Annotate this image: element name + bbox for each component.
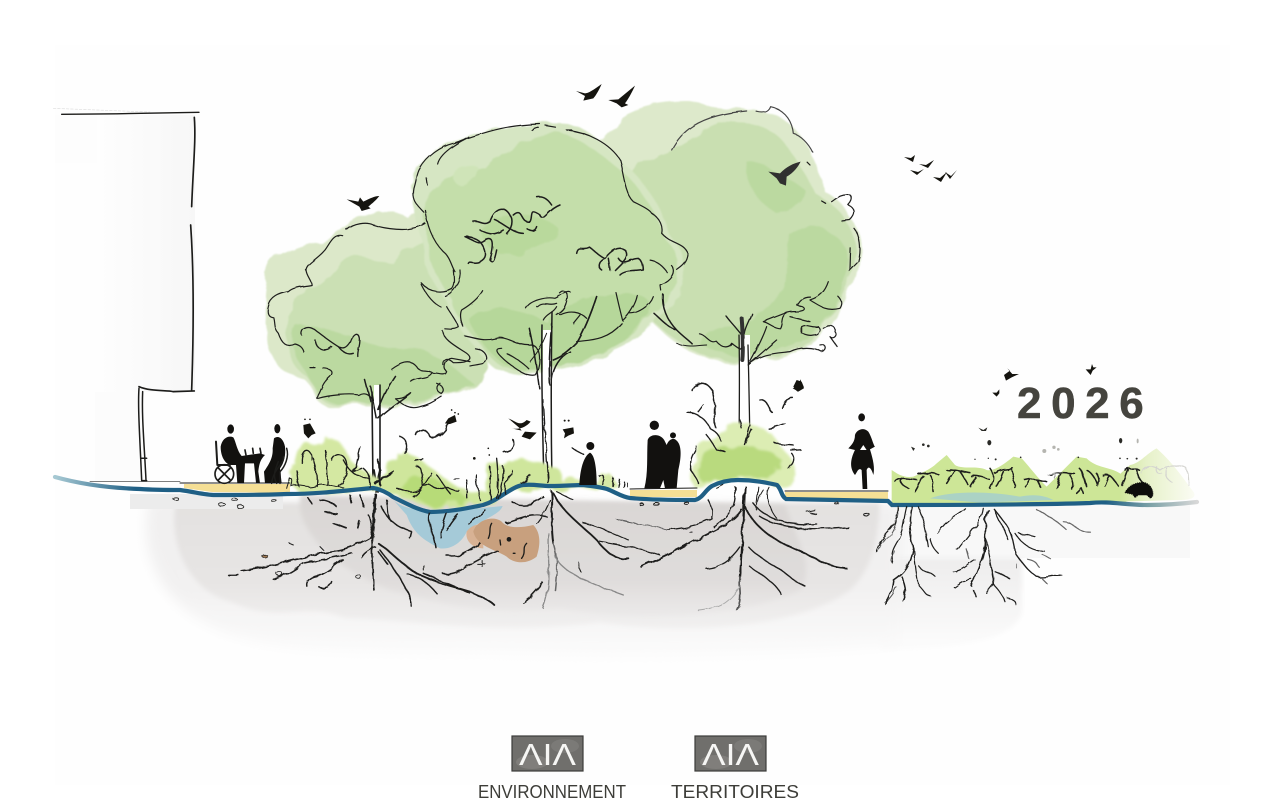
tree ink outlines: left tree and middle tree left side — [268, 124, 572, 418]
blue waterproof ground line — [55, 477, 1197, 512]
tree foliage: left tree — [265, 210, 490, 407]
path edges — [180, 483, 888, 491]
bush under right tree — [691, 424, 795, 486]
tree trunks — [372, 312, 750, 492]
logo: AIA Environnement: ΛIΛ — [519, 737, 576, 772]
logo: AIA Territoires — [695, 736, 766, 772]
person and couple and walker silhouettes — [579, 413, 875, 489]
tree foliage: right tree — [590, 102, 863, 363]
logo: AIA Territoires: ΛIΛ — [702, 737, 759, 772]
roots: left tree — [173, 495, 547, 607]
label: Territoires: TERRITOIRES — [671, 781, 799, 802]
building — [53, 108, 199, 482]
yellow paths — [184, 484, 888, 499]
wheelchair and table group — [215, 424, 287, 483]
shrubs left of the pond — [293, 438, 622, 508]
soil wash underground — [130, 494, 1190, 657]
hedgehog — [1125, 482, 1153, 498]
tree ink outlines: right tree — [553, 107, 860, 365]
shrub ink strokes and wild plants — [287, 423, 530, 500]
birds and flowers — [303, 84, 1097, 460]
roots: meadow — [876, 507, 1090, 606]
pond — [393, 500, 503, 549]
logo: AIA Environnement — [512, 736, 583, 772]
tree foliage: middle tree — [415, 122, 684, 376]
meadow on the right — [892, 427, 1195, 503]
roots: middle and right tree — [537, 485, 898, 611]
label: Environnement: ENVIRONNEMENT — [478, 781, 626, 802]
rock — [466, 519, 539, 562]
year 2026: 2026 — [1017, 379, 1153, 428]
